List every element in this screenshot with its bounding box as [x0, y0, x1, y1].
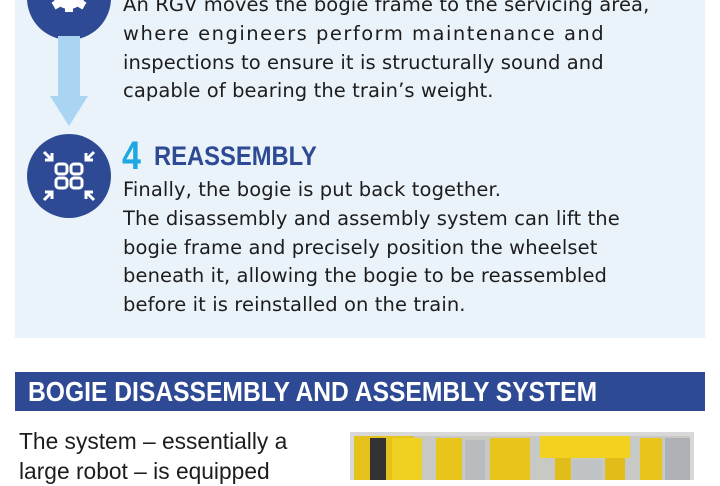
heading bar: system: [15, 372, 705, 411]
text block: step 4 description: before it is reinstalled on the train.: [123, 293, 466, 316]
text block: step 4 description: Finally, the bogie is put back together.: [123, 178, 501, 201]
icon: reassembly circle: [27, 134, 111, 218]
arrow: down: [50, 36, 88, 126]
text block: step 4 description: The disassembly and assembly system can lift the: [123, 207, 620, 230]
heading: 4 reassembly: 4: [122, 134, 141, 178]
text block: step 3 description: [123, 0, 649, 102]
photo: robot system: [350, 432, 694, 480]
text block: step 3 description: capable of bearing the train’s weight.: [123, 79, 494, 102]
text block: step 4 description: [122, 178, 620, 316]
heading: 4 reassembly: [122, 134, 317, 178]
text block: system description: [19, 428, 288, 484]
heading bar: system: BOGIE DISASSEMBLY AND ASSEMBLY SYSTEM: [28, 376, 597, 407]
heading: 4 reassembly: REASSEMBLY: [154, 141, 317, 171]
text block: step 3 description: inspections to ensure it is structurally sound and: [123, 51, 604, 74]
text block: system description: large robot – is equipped: [19, 458, 270, 484]
text block: step 3 description: where engineers perform maintenance and: [123, 22, 605, 45]
icon: gear circle (step 3): [27, 0, 111, 40]
text block: step 4 description: beneath it, allowing the bogie to be reassembled: [123, 264, 607, 287]
text block: system description: The system – essentially a: [19, 428, 287, 454]
text block: step 4 description: bogie frame and precisely position the wheelset: [123, 236, 597, 259]
panel: steps: [15, 0, 705, 338]
